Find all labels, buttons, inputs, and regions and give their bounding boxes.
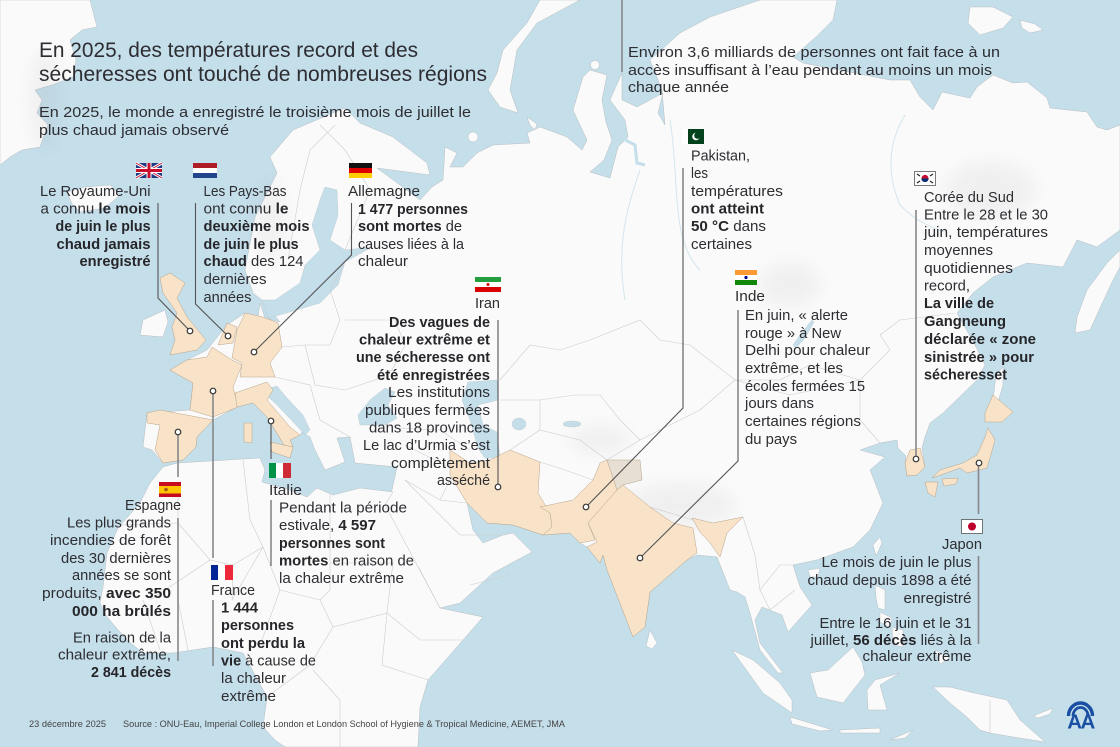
panel: Japan: chaleur extrême	[862, 649, 972, 665]
panel: Spain	[42, 498, 181, 681]
text block: water access: accès insuffisant à l’eau pendant au moins un mois	[628, 63, 992, 79]
icon: Italy flag	[269, 463, 291, 478]
map: country borders	[120, 125, 990, 747]
footer: date: 23 décembre 2025	[29, 719, 106, 729]
panel: Pakistan: Pakistan,	[691, 148, 750, 164]
arrow: UK leader	[158, 203, 193, 334]
panel: Italy: estivale, 4 597	[279, 518, 376, 534]
panel: Italy: Pendant la période	[279, 500, 407, 516]
panel: India	[735, 289, 870, 448]
panel: Netherlands: années	[204, 290, 252, 306]
title	[39, 39, 487, 86]
panel: Italy: Italie	[269, 483, 302, 499]
panel: United Kingdom: Le Royaume-Uni	[40, 184, 150, 200]
panel: Iran: été enregistrées	[377, 368, 490, 384]
panel: Iran: publiques fermées	[365, 403, 490, 419]
panel: India: Delhi pour chaleur	[745, 343, 870, 359]
panel: United Kingdom: chaud jamais	[56, 237, 150, 253]
map: rivers	[622, 115, 945, 300]
United Kingdom	[160, 273, 206, 355]
Greenland	[0, 0, 97, 165]
panel: Japan: enregistré	[904, 591, 972, 607]
panel: Japan	[808, 537, 982, 665]
panel: South Korea: moyennes	[924, 243, 993, 259]
panel: South Korea: sécheresset	[924, 368, 1007, 384]
panel: Germany: chaleur	[358, 254, 408, 270]
arrow: Netherlands leader	[196, 203, 231, 339]
panel: United Kingdom: de juin le plus	[56, 219, 150, 235]
panel: Spain: 2 841 décès	[91, 665, 171, 681]
icon: Spain flag	[159, 482, 181, 497]
panel: Spain: années se sont	[72, 568, 171, 584]
panel: France: extrême	[221, 689, 276, 705]
icon: Pakistan flag	[682, 129, 704, 144]
arrow: Spain leader	[175, 429, 181, 661]
panel: Iran: dans 18 provinces	[369, 420, 490, 436]
panel: Iran: Le lac d’Urmia s’est	[363, 438, 490, 454]
panel: Germany	[348, 184, 468, 270]
panel: France	[211, 583, 316, 705]
panel: Germany: causes liées à la	[358, 237, 465, 253]
subtitle	[39, 105, 471, 139]
icon: South Korea flag	[914, 172, 936, 186]
arrow: leader line for water access note	[621, 0, 623, 72]
Ireland	[140, 310, 168, 337]
arrow: Pakistan leader	[583, 168, 683, 510]
panel: South Korea: sinistrée » pour	[924, 350, 1034, 366]
panel: Spain: 000 ha brûlés	[72, 604, 171, 620]
panel: Germany: Allemagne	[348, 184, 420, 200]
footer: source: Source : ONU-Eau, Imperial College London et London School of Hygiene & Tropical Medicine, AEMET, JMA	[123, 719, 566, 729]
panel: South Korea: juin, températures	[923, 225, 1048, 241]
panel: Japan: Le mois de juin le plus	[822, 555, 972, 571]
panel: Spain: Les plus grands	[67, 516, 171, 532]
icon: AA logo: AA	[1067, 710, 1095, 734]
panel: France: la chaleur	[221, 671, 286, 687]
panel: Spain: produits, avec 350	[42, 586, 171, 602]
icon: France flag	[211, 565, 233, 580]
panel: India: extrême, et les	[745, 361, 843, 377]
panel: South Korea: record,	[924, 278, 970, 294]
panel: Pakistan: certaines	[691, 237, 752, 253]
panel: India: En juin, « alerte	[745, 308, 848, 324]
panel: South Korea	[923, 190, 1048, 384]
arrow: Iran leader	[495, 320, 501, 490]
panel: France: France	[211, 583, 255, 599]
panel: Spain: incendies de forêt	[50, 533, 171, 549]
text block: water access: Environ 3,6 milliards de personnes ont fait face à un	[628, 45, 1000, 61]
panel: Netherlands: deuxième mois	[204, 219, 310, 235]
subtitle: En 2025, le monde a enregistré le troisième mois de juillet le	[39, 105, 471, 121]
panel: Spain: Espagne	[125, 498, 181, 514]
title: En 2025, des températures record et des	[39, 39, 418, 62]
panel: South Korea: Entre le 28 et le 30	[924, 208, 1048, 224]
title: sécheresses ont touché de nombreuses régions	[39, 63, 487, 86]
Eurasia	[143, 0, 1120, 673]
panel: Iran: chaleur extrême et	[359, 332, 490, 348]
panel: Iran: Iran	[475, 296, 500, 312]
arrow: France leader	[210, 388, 216, 666]
panel: Netherlands: chaud des 124	[204, 254, 304, 270]
text block: water access	[628, 45, 1000, 96]
panel: Pakistan: ont atteint	[691, 202, 764, 218]
icon: UK flag	[136, 163, 162, 178]
arrow: India leader	[637, 310, 738, 561]
islands	[488, 0, 580, 113]
panel: Spain: des 30 dernières	[61, 551, 171, 567]
panel: Germany: 1 477 personnes	[358, 202, 468, 218]
arrow: Germany leader	[251, 203, 352, 355]
panel: India: écoles fermées 15	[745, 379, 865, 395]
text block: water access: chaque année	[628, 80, 729, 96]
panel: Germany: sont mortes de	[358, 219, 462, 235]
panel: Spain: En raison de la	[73, 630, 172, 646]
panel: South Korea: Corée du Sud	[924, 190, 1014, 206]
panel: Spain: chaleur extrême,	[58, 648, 171, 664]
panel: United Kingdom: a connu le mois	[40, 202, 150, 218]
map: inland seas	[262, 137, 814, 458]
panel: India: Inde	[735, 289, 765, 305]
panel: France: personnes	[221, 618, 294, 634]
panel: South Korea: Gangneung	[924, 314, 1006, 330]
panel: Netherlands	[204, 184, 310, 306]
panel: Iran: asséché	[437, 473, 490, 489]
panel: Japan: juillet, 56 décès liés à la	[809, 633, 972, 649]
panel: India: certaines régions	[745, 414, 861, 430]
panel: Pakistan: températures	[691, 184, 783, 200]
panel: South Korea: quotidiennes	[924, 261, 1013, 277]
icon: Germany flag	[349, 163, 372, 178]
panel: United Kingdom	[40, 184, 150, 270]
panel: United Kingdom: enregistré	[80, 254, 150, 270]
arrow: Italy leader	[268, 418, 274, 566]
panel: Netherlands: Les Pays-Bas	[204, 184, 286, 200]
panel: South Korea: La ville de	[924, 296, 994, 312]
panel: Italy	[269, 483, 414, 587]
panel: India: rouge » à New	[745, 326, 841, 342]
panel: Pakistan: 50 °C dans	[691, 219, 766, 235]
icon: Netherlands flag	[193, 163, 217, 178]
panel: Italy: personnes sont	[279, 536, 385, 552]
panel: Japan: Entre le 16 juin et le 31	[820, 616, 972, 632]
panel: Netherlands: de juin le plus	[204, 237, 298, 253]
panel: Pakistan: les	[691, 166, 708, 182]
panel: South Korea: déclarée « zone	[924, 332, 1036, 348]
panel: Iran: Des vagues de	[389, 315, 490, 331]
Africa	[100, 458, 483, 747]
panel: Netherlands: ont connu le	[204, 202, 288, 218]
panel: Italy: mortes en raison de	[279, 554, 414, 570]
map: terrain shading	[30, 50, 1035, 527]
panel: France: vie à cause de	[221, 654, 316, 670]
map: highlighted countries	[147, 313, 1013, 637]
Iceland	[67, 185, 120, 212]
panel: India: du pays	[745, 432, 797, 448]
panel: Japan: Japon	[942, 537, 982, 553]
panel: Japan: chaud depuis 1898 a été	[808, 573, 972, 589]
panel: France: ont perdu la	[221, 636, 306, 652]
arrow: South Korea leader	[913, 210, 919, 462]
subtitle: plus chaud jamais observé	[39, 123, 229, 139]
icon: India flag	[735, 270, 757, 285]
panel: Iran: complètement	[391, 456, 490, 472]
panel: France: 1 444	[221, 600, 259, 616]
panel: Iran: une sécheresse ont	[356, 350, 490, 366]
panel: Pakistan	[691, 148, 783, 253]
panel: Iran	[356, 296, 500, 489]
icon: Japan flag	[962, 520, 982, 534]
panel: Italy: la chaleur extrême	[279, 571, 404, 587]
panel: Iran: Les institutions	[388, 385, 490, 401]
arrow: Japan leader	[976, 460, 982, 644]
icon: Iran flag	[475, 277, 501, 292]
panel: India: jours dans	[744, 396, 814, 412]
panel: Netherlands: dernières	[204, 272, 266, 288]
